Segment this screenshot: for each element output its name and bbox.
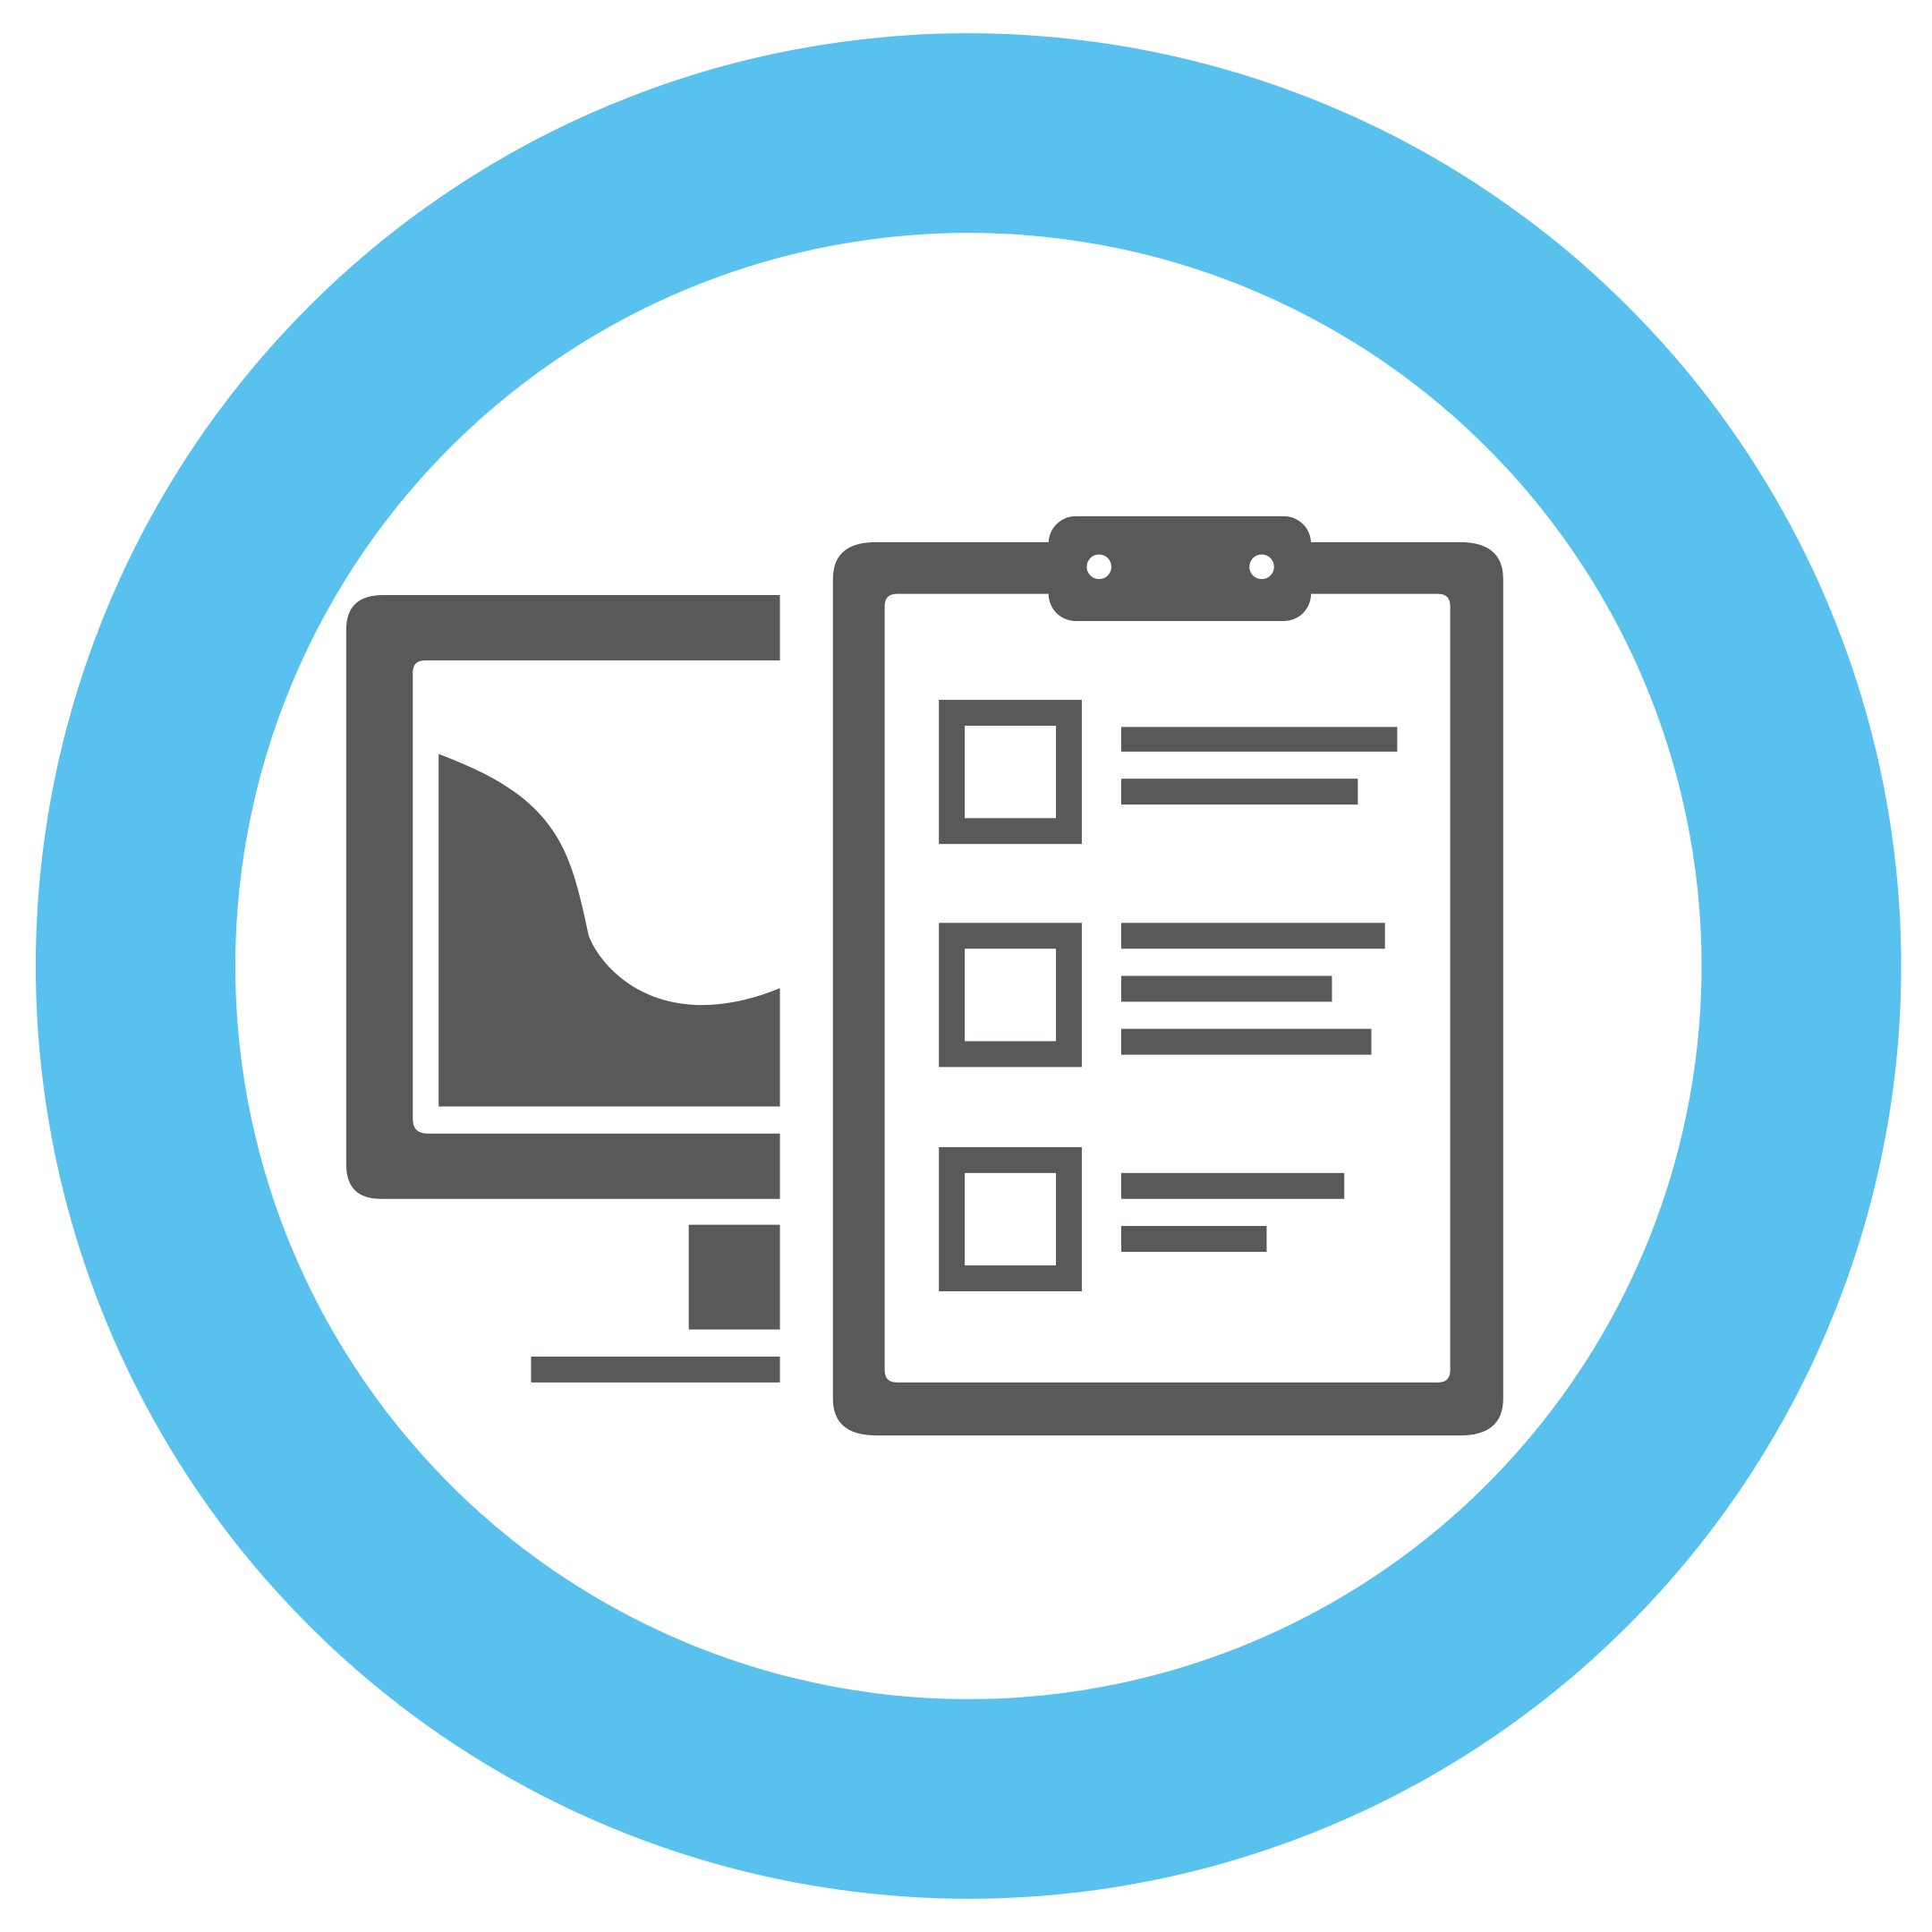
clip — [1049, 516, 1311, 621]
icon: monitor with chart — [346, 595, 780, 1383]
icon: clipboard — [833, 516, 1503, 1435]
checklist rows — [952, 713, 1068, 1279]
blue ring — [135, 133, 1801, 1799]
